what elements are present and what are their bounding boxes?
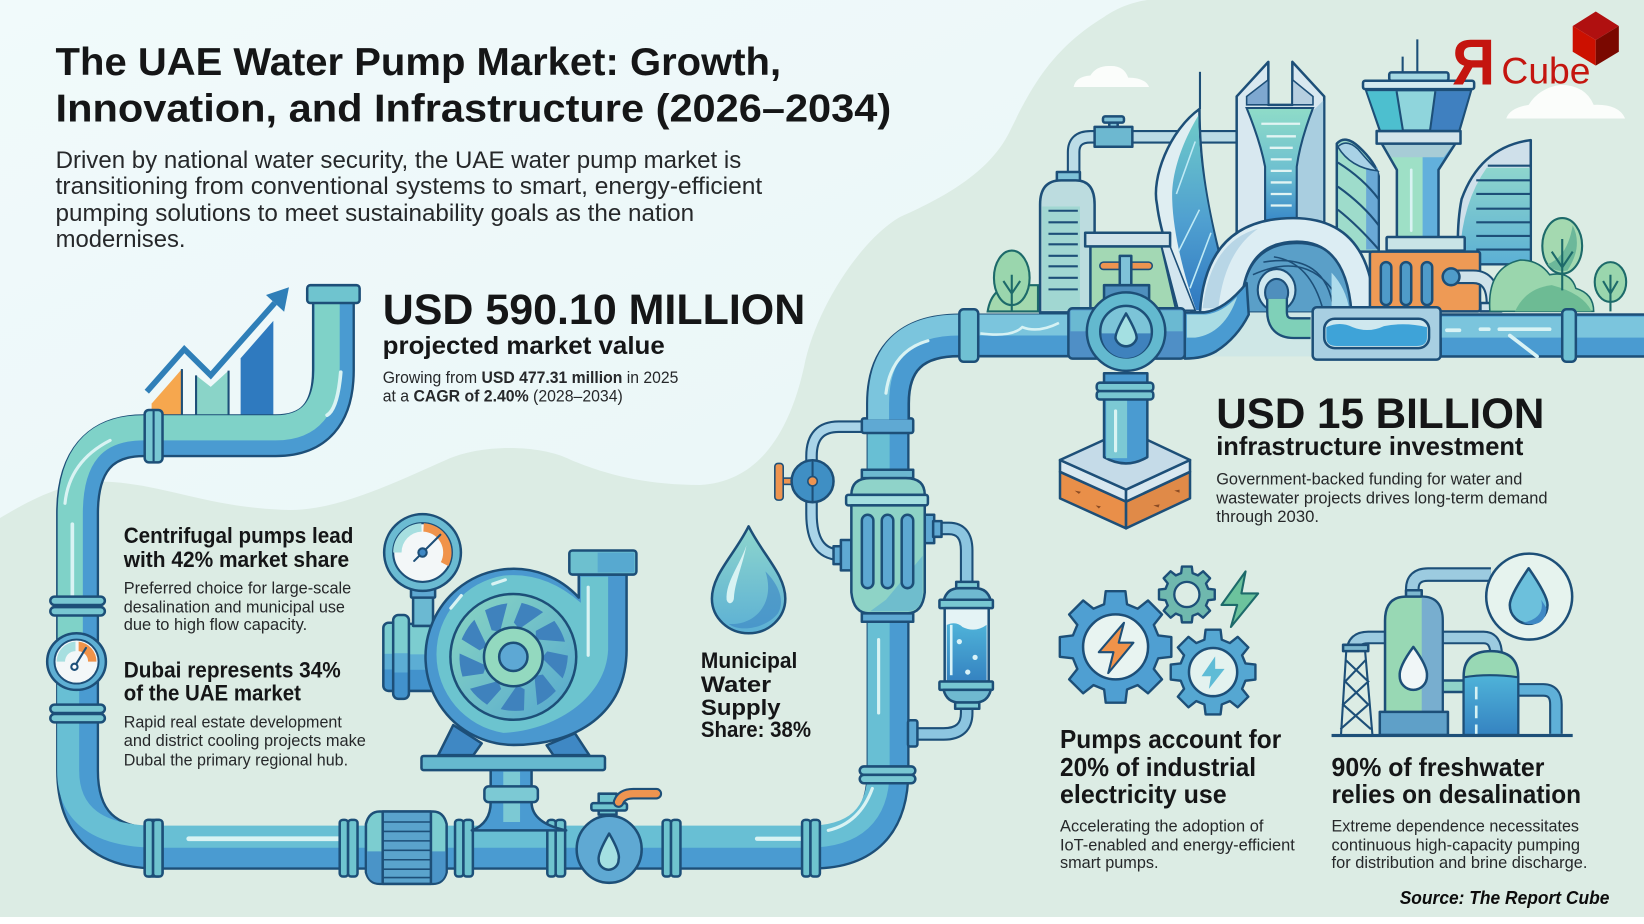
text: centrifugal pumps [123, 523, 353, 634]
text: freshwater desalination: 90% of freshwater [1332, 752, 1544, 782]
text: projected market value: USD 590.10 MILLION [383, 286, 805, 334]
intro paragraph [56, 147, 763, 253]
medium blue gear [1171, 630, 1255, 714]
pale gap under arch [1206, 312, 1316, 356]
intro paragraph: transitioning from conventional systems to smart, energy-efficient [56, 173, 763, 200]
right bushes and trees [1490, 218, 1626, 311]
intro paragraph: modernises. [56, 226, 186, 253]
intro paragraph: Driven by national water security, the UAE water pump market is [56, 147, 741, 174]
small tank [1464, 651, 1518, 735]
text: centrifugal pumps: Centrifugal pumps lead [124, 523, 353, 548]
text: Dubai share: Dubai represents 34% [124, 657, 341, 682]
text: industrial electricity [1060, 724, 1295, 872]
flange [860, 775, 915, 783]
text: freshwater desalination: Extreme dependence necessitates [1332, 816, 1579, 835]
icon: desalination plant [1332, 554, 1573, 737]
pipe flanges [50, 285, 811, 877]
title [56, 40, 891, 131]
text: projected market value: Growing from USD 477.31 million in 2025 [383, 368, 678, 387]
storage tank [1040, 172, 1095, 312]
text: freshwater desalination: for distribution and brine discharge. [1332, 853, 1587, 872]
main valve with drop [1068, 292, 1185, 371]
green bolt [1221, 571, 1258, 627]
centrifugal pump [383, 514, 636, 830]
text: industrial electricity: IoT-enabled and energy-efficient [1060, 835, 1295, 854]
gauge on left pipe [47, 633, 106, 690]
drop in circle [1486, 554, 1572, 640]
logo: Cube [1501, 50, 1591, 91]
pipes [1353, 575, 1556, 734]
right run of pipe [1441, 309, 1644, 362]
twin-tip tower [1237, 62, 1324, 233]
skyline scene [988, 39, 1644, 528]
text: municipal supply share: Municipal [701, 648, 797, 673]
pump gauge [384, 514, 461, 626]
icon: gears and lightning [1060, 567, 1258, 714]
text: Dubai share [124, 657, 366, 769]
intro paragraph: pumping solutions to meet sustainability goals as the nation [56, 200, 694, 227]
upper thin pipe and valve [1074, 116, 1239, 176]
clouds [1074, 66, 1625, 118]
flange [860, 766, 915, 775]
text: industrial electricity: Pumps account for [1060, 724, 1281, 754]
text: infrastructure investment: infrastructure investment [1216, 431, 1524, 461]
orange pump block [1370, 252, 1501, 311]
icon: municipal water drop [712, 526, 785, 633]
text: infrastructure investment: through 2030. [1216, 507, 1319, 526]
pipe: left run from outlet to bottom [65, 299, 888, 848]
impeller [450, 594, 576, 720]
text: municipal supply share: Supply [701, 695, 781, 720]
text: freshwater desalination: relies on desalination [1332, 779, 1581, 809]
text: municipal supply share: Water [701, 672, 772, 697]
source note: Source: The Report Cube [1400, 887, 1609, 908]
right-hand building [1458, 140, 1531, 264]
bottom run flanges [145, 820, 820, 877]
text: Dubai share: and district cooling projects make [124, 731, 366, 750]
filter housing [846, 418, 928, 622]
plate and green block [1085, 233, 1195, 310]
text: industrial electricity: electricity use [1060, 779, 1227, 809]
title: Innovation, and Infrastructure (2026–2034) [56, 87, 891, 131]
text: centrifugal pumps: desalination and municipal use [124, 597, 345, 616]
side bypass with valve [775, 427, 862, 570]
volute and discharge [426, 550, 636, 745]
logo: Я [1452, 25, 1495, 98]
text: municipal supply share [701, 648, 811, 742]
text: centrifugal pumps: Preferred choice for large-scale [124, 578, 351, 597]
text: projected market value [383, 286, 805, 406]
logo [1452, 12, 1619, 98]
striped tower [1337, 140, 1379, 252]
icon: growth bar chart [147, 287, 289, 416]
sail tower [1156, 72, 1227, 312]
inline strainer [366, 812, 447, 884]
left trees [988, 251, 1038, 311]
large blue gear [1060, 591, 1171, 703]
upper pipe to skyline [879, 309, 1185, 419]
text: centrifugal pumps: due to high flow capacity. [124, 615, 307, 634]
lattice tower [1341, 645, 1372, 735]
vertical filter assembly [775, 418, 993, 783]
text: industrial electricity: 20% of industrial [1060, 752, 1256, 782]
text: infrastructure investment: wastewater projects drives long-term demand [1215, 488, 1548, 507]
text: Dubai share: of the UAE market [124, 680, 302, 705]
text: freshwater desalination: continuous high-capacity pumping [1332, 835, 1580, 854]
text: municipal supply share: Share: 38% [701, 717, 811, 742]
glass flow meter [1313, 307, 1441, 360]
bottom valve [577, 794, 656, 883]
main tank [1380, 590, 1448, 735]
arch pipe with water [1200, 218, 1375, 312]
text: centrifugal pumps: with 42% market share [123, 547, 349, 572]
title: The UAE Water Pump Market: Growth, [56, 40, 781, 84]
control tower [1363, 39, 1474, 251]
text: freshwater desalination [1332, 752, 1587, 872]
pump stand and connection [421, 725, 605, 830]
text: infrastructure investment: Government-backed funding for water and [1216, 469, 1522, 488]
text: projected market value: at a CAGR of 2.40% (2028–2034) [383, 387, 623, 406]
text: projected market value: projected market value [383, 332, 665, 360]
text: infrastructure investment: USD 15 BILLION [1216, 390, 1544, 438]
text: industrial electricity: Accelerating the adoption of [1060, 816, 1264, 835]
text: infrastructure investment [1215, 390, 1548, 526]
text: industrial electricity: smart pumps. [1060, 853, 1159, 872]
text: Dubai share: Rapid real estate development [124, 713, 342, 732]
small green gear [1159, 567, 1215, 622]
suction inlet [383, 615, 434, 699]
pipe from valve into arch [1185, 283, 1311, 359]
ground line [1332, 734, 1573, 737]
sight glass [908, 515, 993, 747]
valve stem and foundation block [1060, 373, 1190, 528]
text: Dubai share: Dubal the primary regional hub. [124, 750, 348, 769]
